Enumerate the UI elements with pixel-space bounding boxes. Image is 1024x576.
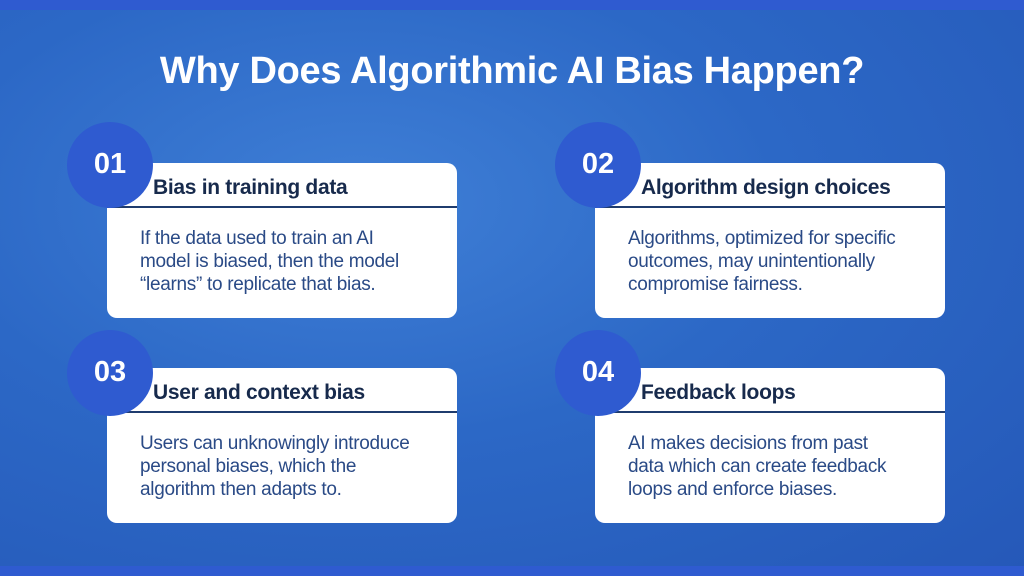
heading: algorithm design choices: Algorithm design choices: [641, 176, 891, 199]
text: card 04 body: loops and enforce biases.: [628, 479, 837, 500]
panel: card 04: [595, 368, 945, 523]
icon: number 04 circle: 04: [582, 356, 614, 388]
text: card 02 body: [628, 228, 896, 295]
icon: number 03 circle: [67, 330, 153, 416]
text: card 04 body: AI makes decisions from past: [628, 433, 868, 454]
text: card 03 body: personal biases, which the: [140, 456, 356, 477]
text: card 01 body: model is biased, then the model: [140, 251, 399, 272]
icon: number 01 circle: 01: [94, 148, 126, 180]
icon: number 04 circle: [555, 330, 641, 416]
text: card 03 body: algorithm then adapts to.: [140, 479, 342, 500]
icon: number 03 circle: 03: [94, 356, 126, 388]
text: card 02 body: compromise fairness.: [628, 274, 803, 295]
icon: number 02 circle: 02: [582, 148, 614, 180]
text: card 03 body: [140, 433, 410, 500]
text: card 01 body: “learns” to replicate that bias.: [140, 274, 375, 295]
text: card 01 body: If the data used to train an AI: [140, 228, 374, 249]
text: card 02 body: outcomes, may unintentionally: [628, 251, 875, 272]
heading: feedback loops: Feedback loops: [641, 381, 796, 404]
text: card 03 body: Users can unknowingly introduce: [140, 433, 410, 454]
heading: bias in training data: [107, 163, 457, 208]
heading: algorithm design choices: [595, 163, 945, 208]
title: Why Does Algorithmic AI Bias Happen?: [160, 50, 864, 92]
icon: number 01 circle: [67, 122, 153, 208]
icon: number 02 circle: [555, 122, 641, 208]
panel: card 01: [107, 163, 457, 318]
text: card 01 body: [140, 228, 399, 295]
heading: user and context bias: [107, 368, 457, 413]
heading: feedback loops: [595, 368, 945, 413]
panel: card 03: [107, 368, 457, 523]
text: card 02 body: Algorithms, optimized for specific: [628, 228, 896, 249]
text: card 04 body: [628, 433, 886, 500]
heading: bias in training data: Bias in training data: [153, 176, 347, 199]
heading: user and context bias: User and context bias: [153, 381, 365, 404]
text: card 04 body: data which can create feedback: [628, 456, 886, 477]
panel: card 02: [595, 163, 945, 318]
